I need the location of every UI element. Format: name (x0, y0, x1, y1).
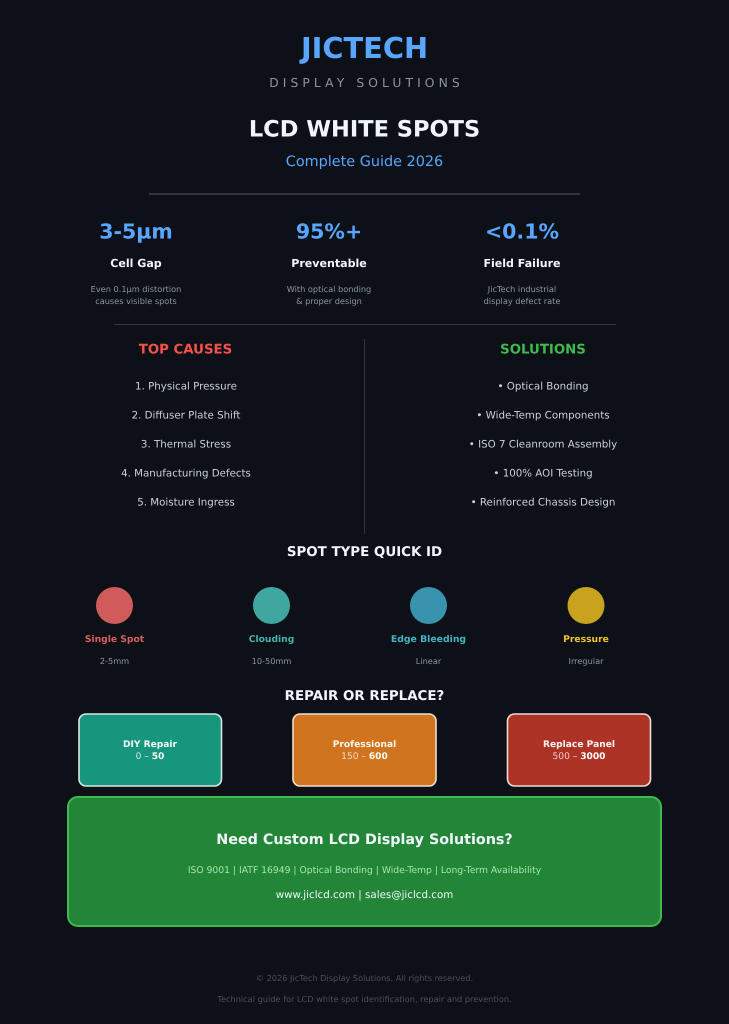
causes list: 3. Thermal Stress (141, 438, 231, 450)
causes list (121, 380, 251, 508)
stat: cell gap: Cell Gap (110, 257, 162, 270)
stat: cell gap: causes visible spots (95, 296, 177, 306)
spot: single spot (85, 587, 145, 666)
heading: top causes: TOP CAUSES (139, 342, 232, 358)
spot: pressure: Pressure (563, 634, 609, 645)
panel: top causes (121, 342, 251, 508)
spot: clouding: 10-50mm (252, 656, 291, 666)
card: diy repair: 0 – 50 (136, 752, 164, 762)
card: professional: 150 – 600 (341, 752, 388, 762)
spot: clouding: Clouding (249, 634, 294, 645)
stat: preventable (287, 220, 371, 306)
solutions list: • Wide-Temp Components (476, 410, 610, 422)
stat: field failure: <0.1% (485, 220, 559, 244)
card: professional (293, 714, 436, 786)
panel: spot type quick id (85, 545, 609, 666)
panel: solutions (469, 342, 617, 508)
stat: preventable: & proper design (296, 296, 362, 306)
logo: JICTECH (299, 31, 428, 65)
solutions list: • 100% AOI Testing (493, 468, 593, 480)
footer: © 2026 JicTech Display Solutions. All rights reserved. (256, 973, 473, 983)
heading: solutions: SOLUTIONS (500, 342, 586, 358)
card: professional: Professional (333, 740, 396, 750)
stat: cell gap: Even 0.1µm distortion (91, 284, 181, 294)
causes list: 4. Manufacturing Defects (121, 468, 251, 480)
stat: preventable: With optical bonding (287, 284, 371, 294)
header (249, 31, 480, 170)
cta certifications: ISO 9001 | IATF 16949 | Optical Bonding | Wide-Temp | Long-Term Availability (188, 865, 542, 876)
spot: edge bleeding: Edge Bleeding (391, 634, 466, 645)
tagline: DISPLAY SOLUTIONS (269, 76, 464, 90)
spot: pressure (563, 587, 609, 666)
spot: pressure: Irregular (569, 656, 604, 666)
heading: spot type: SPOT TYPE QUICK ID (287, 545, 442, 560)
subtitle: Complete Guide 2026 (286, 154, 443, 170)
card: replace panel (508, 714, 650, 786)
stat: field failure: JicTech industrial (487, 284, 556, 294)
causes list: 5. Moisture Ingress (137, 496, 235, 508)
card: diy repair (79, 714, 222, 786)
spot: single spot: 2-5mm (100, 656, 129, 666)
footer (216, 973, 512, 1004)
spot: clouding (249, 587, 294, 666)
heading: repair or replace: REPAIR OR REPLACE? (285, 689, 444, 704)
spot: edge bleeding: Linear (416, 656, 442, 666)
causes list: 1. Physical Pressure (135, 380, 237, 392)
title: LCD WHITE SPOTS (249, 116, 480, 142)
stat: field failure (483, 220, 561, 306)
footer: Technical guide for LCD white spot identification, repair and prevention. (216, 994, 512, 1004)
stat: field failure: Field Failure (483, 257, 561, 270)
panel: repair or replace (79, 689, 650, 786)
solutions list (469, 380, 617, 508)
stat: preventable: Preventable (291, 257, 367, 270)
card: replace panel: 500 – 3000 (552, 752, 606, 762)
spot: single spot: Single Spot (85, 634, 145, 645)
card: diy repair: DIY Repair (123, 740, 178, 750)
spot: edge bleeding (391, 587, 466, 666)
panel: call to action (68, 797, 661, 926)
cta heading: Need Custom LCD Display Solutions? (216, 832, 513, 848)
cta contact: www.jiclcd.com | sales@jiclcd.com (276, 889, 453, 901)
solutions list: • ISO 7 Cleanroom Assembly (469, 438, 617, 450)
stat: field failure: display defect rate (484, 296, 560, 306)
solutions list: • Optical Bonding (497, 380, 589, 392)
causes list: 2. Diffuser Plate Shift (132, 410, 240, 422)
stat: preventable: 95%+ (296, 220, 362, 244)
solutions list: • Reinforced Chassis Design (471, 496, 615, 508)
stat: cell gap: 3-5µm (99, 220, 173, 244)
stat: cell gap (91, 220, 181, 306)
card: replace panel: Replace Panel (543, 740, 615, 750)
stats row (91, 220, 561, 306)
